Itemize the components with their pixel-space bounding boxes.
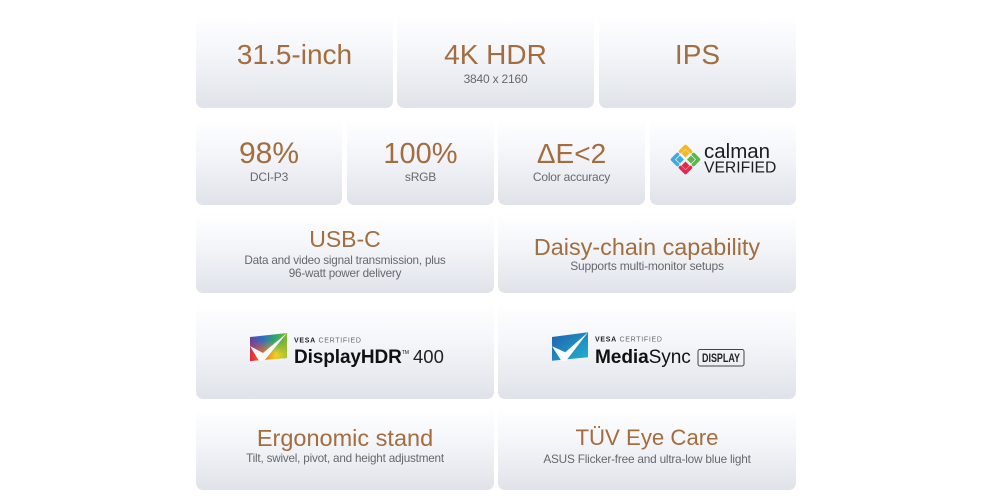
text: 400: 400: [413, 346, 444, 367]
text: VERIFIED: VERIFIED: [704, 160, 776, 176]
text: calman: calman: [704, 140, 770, 163]
text: DisplayHDR: TM: [402, 350, 409, 356]
panel: color accuracy: [498, 118, 645, 205]
panel: MediaSync: [498, 303, 796, 399]
icon: Calman diamonds: [672, 146, 698, 172]
icon: MediaSync check screen: [552, 332, 588, 361]
text: Eye care description: ASUS Flicker-free and ultra-low blue light: [543, 452, 751, 466]
logo: Calman Verified: [670, 140, 776, 176]
text: USB-C description: Data and video signal transmission, plus: [244, 254, 446, 267]
heading: IPS: IPS: [675, 39, 720, 70]
logo: VESA DisplayHDR 400: [250, 333, 444, 368]
badge: DISPLAY: [698, 350, 744, 366]
panel: 31.5-inch: [196, 14, 393, 108]
panel: Calman Verified: [650, 118, 796, 205]
text: Daisy-chain description: Supports multi-monitor setups: [570, 259, 724, 273]
text: DCI-P3: DCI-P3: [250, 170, 288, 184]
text: VESA CERTIFIED: VESA CERTIFIED: [294, 338, 362, 344]
text: Ergonomic description: Tilt, swivel, pivot, and height adjustment: [246, 452, 444, 465]
heading: 4K HDR: 4K HDR: [444, 39, 547, 70]
panel: 4K HDR: [397, 14, 594, 108]
icon: HDR check screen: [250, 333, 287, 361]
heading: Ergonomic stand: Ergonomic stand: [257, 425, 433, 451]
panel: Daisy-chain: [498, 213, 796, 293]
heading: Daisy-chain capability: Daisy-chain capability: [534, 234, 760, 260]
panel: USB-C: [196, 213, 494, 293]
heading: TÜV Eye Care: TÜV Eye Care: [575, 425, 719, 450]
logo: VESA MediaSync Display: [552, 332, 744, 368]
text: resolution: 3840 x 2160: [464, 72, 527, 86]
heading: delta E under 2: ΔE<2: [537, 138, 606, 169]
heading: USB-C: USB-C: [309, 226, 381, 252]
panel: TUV Eye Care: [498, 408, 796, 490]
text: DisplayHDR: DisplayHDR: [294, 347, 402, 368]
text: sRGB: sRGB: [405, 170, 436, 184]
panel: 100% sRGB: [347, 118, 494, 205]
text: USB-C description: 96-watt power delivery: [289, 267, 401, 280]
panel: IPS: [599, 14, 796, 108]
heading: 31.5-inch: 31.5-inch: [237, 39, 352, 70]
panel: Ergonomic stand: [196, 408, 494, 490]
badge: DISPLAY: DISPLAY: [702, 351, 740, 365]
panel: DisplayHDR 400: [196, 333, 494, 399]
heading: 98%: 98%: [239, 137, 299, 170]
heading: 100%: 100%: [383, 138, 458, 170]
text: MediaSync: MediaSync: [595, 347, 691, 368]
text: USB-C description: [244, 254, 446, 280]
text: VESA CERTIFIED: VESA CERTIFIED: [595, 336, 663, 344]
panel: 98% DCI-P3: [196, 118, 342, 205]
text: color accuracy: Color accuracy: [533, 170, 610, 184]
